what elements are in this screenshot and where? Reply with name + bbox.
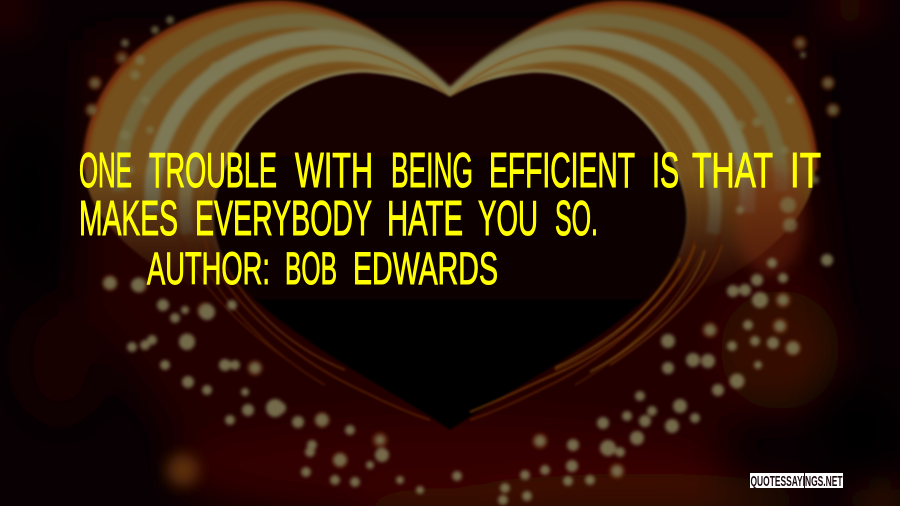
upper sparkles <box>88 16 837 232</box>
quote line 2: SO. <box>555 192 598 246</box>
quote line 2: YOU <box>478 192 538 246</box>
watermark box <box>750 473 843 488</box>
quote line 1: IS <box>652 144 679 198</box>
quote line 1: TROUBLE <box>149 144 277 198</box>
quote text <box>79 144 821 246</box>
quote line 1: ONE <box>79 144 132 198</box>
quote line 1: IT <box>790 144 821 198</box>
author line: AUTHOR: <box>147 243 270 294</box>
quote line 2: HATE <box>387 192 463 246</box>
right lobe bands <box>450 3 815 420</box>
quote line 1: WITH <box>295 144 373 198</box>
watermark <box>750 473 843 490</box>
black heart centre <box>214 73 686 430</box>
left lobe bands <box>85 3 450 420</box>
quote line 1: THAT <box>692 144 773 198</box>
sparkle halos <box>85 36 840 479</box>
corner black patches <box>0 110 900 475</box>
quote line 1 <box>79 144 821 198</box>
right side orange glow <box>735 165 805 275</box>
quote line 2: EVERYBODY <box>195 192 372 246</box>
lower strands right side <box>470 245 722 412</box>
left lower lens glow <box>167 454 199 486</box>
author line: BOB <box>285 243 337 294</box>
sparkle cores <box>104 254 833 505</box>
author line: EDWARDS <box>353 243 498 294</box>
quote line 2: MAKES <box>79 192 178 246</box>
author line <box>147 243 498 294</box>
quote line 1: EFFICIENT <box>489 144 635 198</box>
quote line 2 <box>79 192 598 246</box>
quote line 1: BEING <box>391 144 473 198</box>
